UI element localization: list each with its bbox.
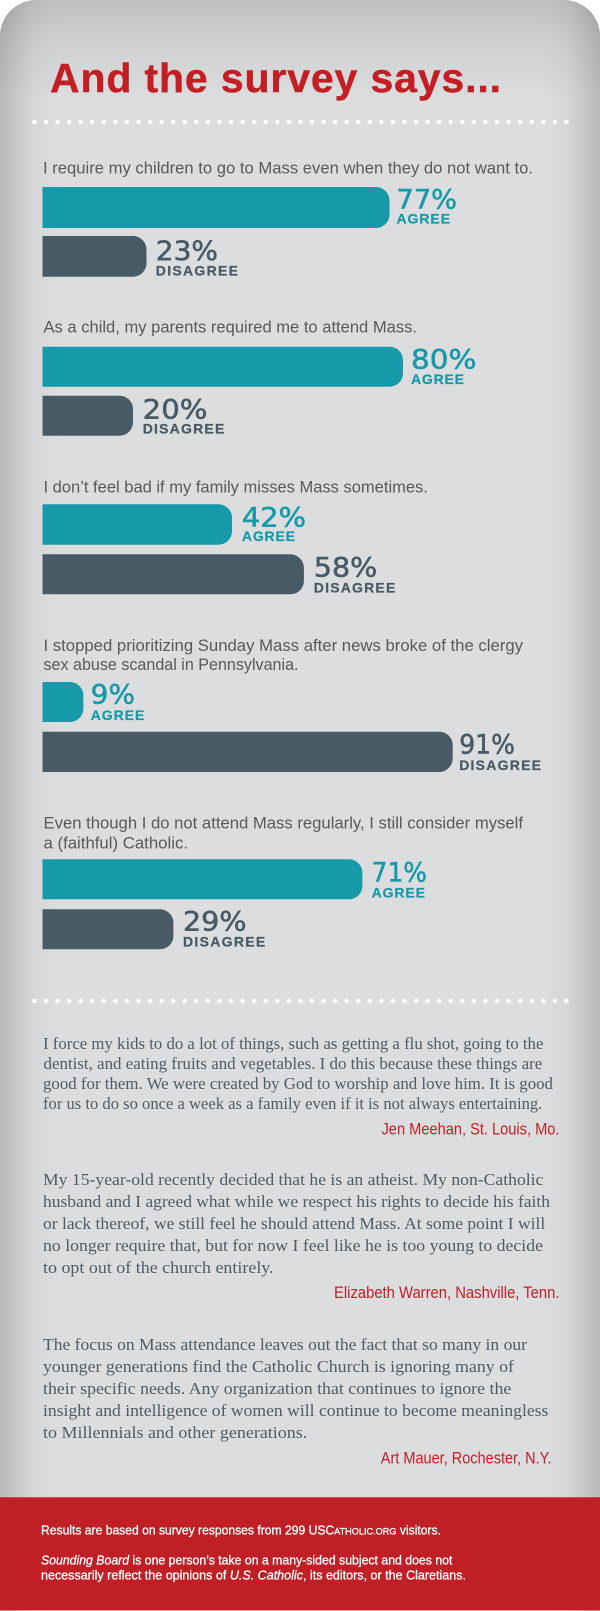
value: 58% disagree: 58% <box>314 553 377 584</box>
quote text: to opt out of the church entirely. <box>43 1258 274 1277</box>
quote text: younger generations find the Catholic Church is ignoring many of <box>43 1357 515 1376</box>
footer note: survey base: Results are based on survey responses from 299 USCATHOLIC.ORG visitors. <box>41 1523 441 1537</box>
quote text: The focus on Mass attendance leaves out the fact that so many in our <box>43 1335 527 1354</box>
value: 29% disagree <box>183 907 265 950</box>
bar: 58% disagree <box>42 554 304 594</box>
value: 23% disagree: 23% <box>156 236 218 267</box>
quote text: I force my kids to do a lot of things, such as getting a flu shot, going to the <box>43 1034 543 1053</box>
bar: 29% disagree <box>42 909 173 949</box>
bar: 91% disagree <box>42 732 453 772</box>
quote text <box>43 1170 551 1277</box>
value: 77% agree: AGREE <box>396 211 450 227</box>
question text 4: I stopped prioritizing Sunday Mass after news broke of the clergy <box>44 637 524 655</box>
quote: Art Mauer <box>43 1335 552 1467</box>
quote: Elizabeth Warren <box>43 1170 560 1302</box>
quote: Jen Meehan <box>43 1034 560 1138</box>
value: 80% agree: 80% <box>411 344 476 375</box>
value: 80% agree: AGREE <box>411 371 464 387</box>
footer note: disclaimer: Sounding Board is one person’s take on a many-sided subject and does not <box>41 1553 453 1567</box>
value: 42% agree: AGREE <box>242 528 295 544</box>
value: 71% agree: AGREE <box>372 885 425 901</box>
value: 29% disagree: DISAGREE <box>183 934 265 950</box>
bar: 71% agree <box>42 859 362 899</box>
value: 91% disagree <box>459 729 541 773</box>
bar: 20% disagree <box>42 396 133 436</box>
value: 91% disagree: DISAGREE <box>459 757 541 773</box>
value: 9% agree: 9% <box>91 679 135 710</box>
value: 71% agree: 71% <box>372 858 427 889</box>
footer note: disclaimer <box>41 1553 466 1582</box>
title: And the survey says... <box>50 55 501 101</box>
panel: survey question 4 <box>42 637 541 773</box>
quote text: husband and I agreed what while we respect his rights to decide his faith <box>43 1192 551 1211</box>
value: 20% disagree: DISAGREE <box>143 420 224 436</box>
quote text <box>43 1335 548 1442</box>
value: 23% disagree: DISAGREE <box>156 263 238 279</box>
attribution: Art Mauer, Rochester, N.Y. <box>381 1449 552 1467</box>
value: 71% agree <box>372 858 427 901</box>
quote text: dentist, and eating fruits and vegetables. I do this because these things are <box>44 1054 542 1073</box>
question text 5: Even though I do not attend Mass regularly, I still consider myself <box>44 814 523 832</box>
value: 58% disagree <box>314 553 395 596</box>
value: 77% agree: 77% <box>396 184 457 215</box>
bar: 23% disagree <box>42 236 146 277</box>
value: 9% agree <box>91 679 144 723</box>
value: 80% agree <box>411 344 476 387</box>
panel: survey question 5 <box>42 814 523 950</box>
value: 58% disagree: DISAGREE <box>314 580 395 596</box>
question text 4: sex abuse scandal in Pennsylvania. <box>44 656 298 674</box>
value: 91% disagree: 91% <box>459 729 515 760</box>
panel: survey question 3 <box>42 478 428 596</box>
value: 23% disagree <box>156 236 238 279</box>
quote text: their specific needs. Any organization that continues to ignore the <box>43 1379 511 1398</box>
quote text: My 15-year-old recently decided that he is an atheist. My non-Catholic <box>43 1170 543 1189</box>
quote text <box>43 1034 554 1113</box>
question text 1: I require my children to go to Mass even when they do not want to. <box>43 159 533 177</box>
value: 20% disagree: 20% <box>143 394 207 425</box>
value: 29% disagree: 29% <box>183 907 246 938</box>
quote text: insight and intelligence of women will continue to become meaningless <box>43 1401 548 1420</box>
attribution: Elizabeth Warren, Nashville, Tenn. <box>334 1284 560 1302</box>
quote text: for us to do so once a week as a family even if it is not always entertaining. <box>43 1094 542 1113</box>
value: 9% agree: AGREE <box>91 707 144 723</box>
question text 4 <box>44 637 524 674</box>
quote text: or lack thereof, we still feel he should attend Mass. At some point I will <box>43 1214 546 1233</box>
bar: 9% agree <box>42 682 83 722</box>
quote text: good for them. We were created by God to worship and love him. It is good <box>43 1074 554 1093</box>
footer band <box>0 1497 600 1610</box>
panel: survey question 2 <box>42 318 476 436</box>
question text 2: As a child, my parents required me to attend Mass. <box>44 318 417 336</box>
bar: 80% agree <box>42 347 403 387</box>
bar: 42% agree <box>42 504 232 545</box>
question text 5 <box>44 814 523 852</box>
quote text: no longer require that, but for now I feel like he is too young to decide <box>43 1236 543 1255</box>
question text 3: I don’t feel bad if my family misses Mass sometimes. <box>44 478 428 496</box>
quote text: to Millennials and other generations. <box>43 1423 307 1442</box>
bar: 77% agree <box>42 187 390 228</box>
attribution: Jen Meehan, St. Louis, Mo. <box>382 1120 560 1138</box>
question text 5: a (faithful) Catholic. <box>44 834 188 852</box>
panel: survey question 1 <box>42 159 533 279</box>
footer note: disclaimer: necessarily reflect the opinions of U.S. Catholic, its editors, or the Claretians. <box>41 1568 466 1582</box>
value: 42% agree: 42% <box>242 503 306 534</box>
value: 20% disagree <box>143 394 224 436</box>
